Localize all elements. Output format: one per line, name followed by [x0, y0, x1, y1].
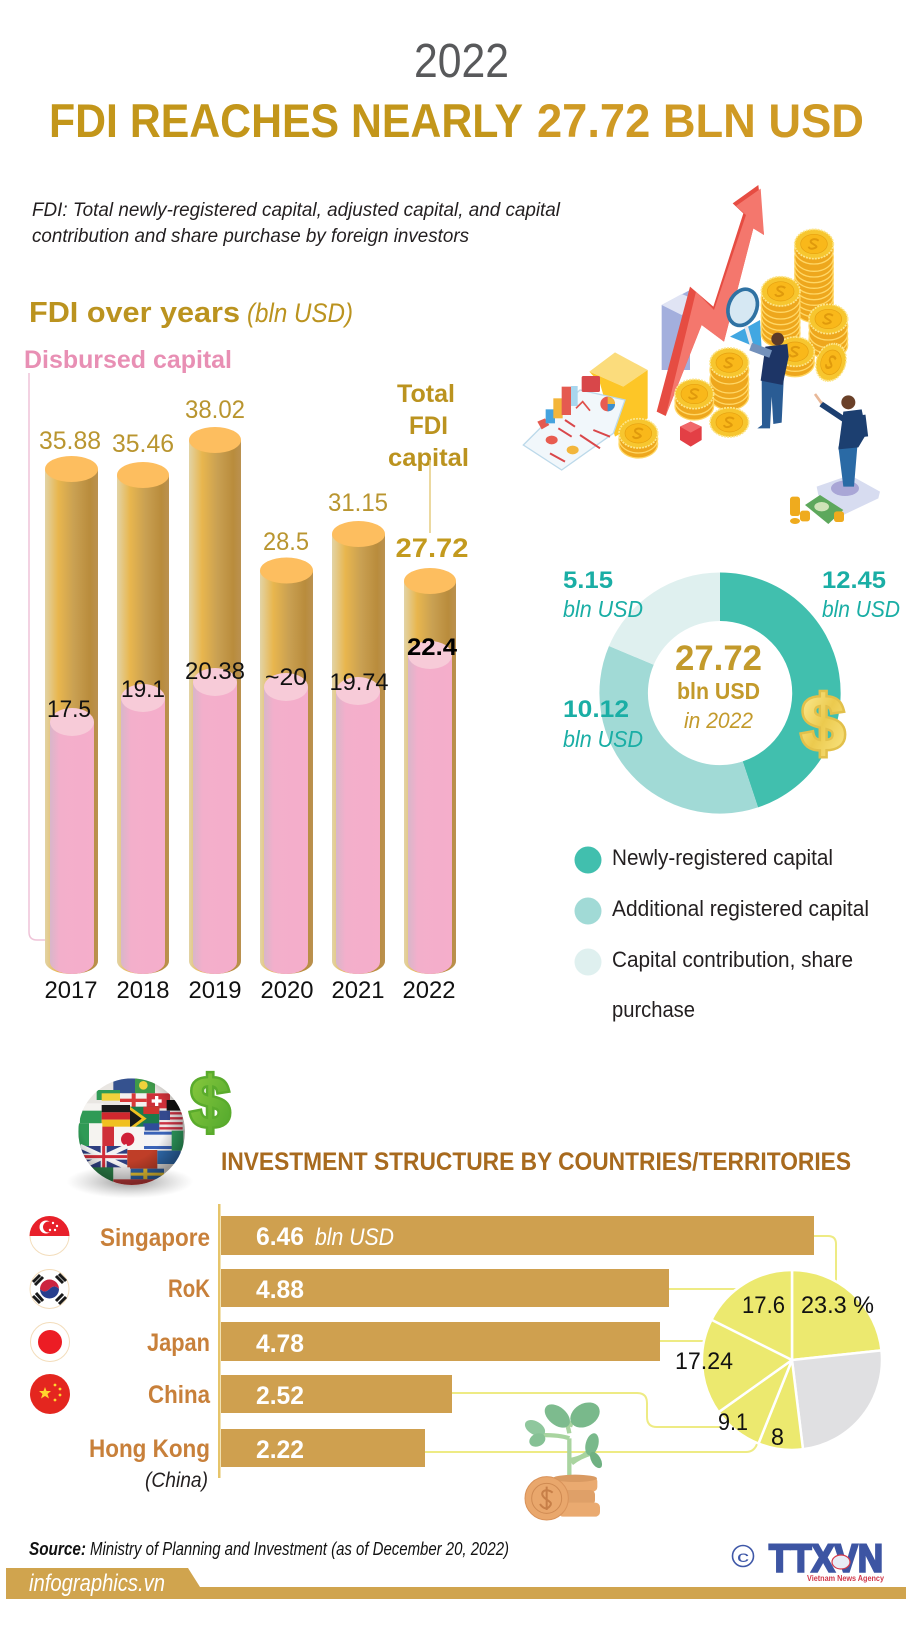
value label: additional registered: 10.12 [563, 696, 629, 723]
Hong Kong row: 2.22 [256, 1436, 304, 1464]
2022 column: 2022 [402, 977, 456, 1004]
FDI over years heading: FDI over years [29, 297, 240, 329]
total FDI capital label and leader: capital [388, 444, 469, 472]
pie chart: investor shares: 9.1 [718, 1409, 748, 1436]
footer banner [6, 1568, 906, 1599]
title [49, 35, 864, 147]
Singapore row: 6.46 [256, 1223, 304, 1251]
Singapore row: bln USD [315, 1224, 394, 1251]
2018 column: 19.1 [121, 676, 165, 703]
FDI definition text: contribution and share purchase by foreign investors [32, 225, 469, 247]
icon: flag globe [74, 1078, 186, 1196]
logo: TTXVN: TTXVN [769, 1538, 883, 1580]
source note: Source: [29, 1538, 86, 1559]
2018 column [112, 430, 174, 1004]
logo: TTXVN: Vietnam News Agency [807, 1574, 884, 1583]
donut legend: Additional registered capital [612, 896, 869, 921]
Singapore row: Singapore [100, 1224, 210, 1252]
title: 27.72 BLN USD [537, 94, 864, 147]
2022 column: 22.4 [407, 634, 458, 661]
China row [30, 1374, 452, 1414]
value label: capital contribution: bln USD [563, 596, 643, 622]
man with magnifier [751, 333, 789, 428]
footer banner: infographics.vn [29, 1570, 165, 1597]
donut centre total: in 2022 [684, 708, 753, 733]
2022 column: 27.72 [396, 533, 468, 563]
pie chart: investor shares: 23.3 % [801, 1292, 874, 1319]
value label: capital contribution: 5.15 [563, 567, 613, 594]
donut legend: Capital contribution, share [612, 947, 853, 972]
connector lines to share pie [425, 1236, 836, 1452]
investment structure heading: INVESTMENT STRUCTURE BY COUNTRIES/TERRITORIES [221, 1148, 851, 1176]
donut centre total [675, 639, 762, 733]
2017 column: 17.5 [47, 696, 91, 723]
value label: additional registered: bln USD [563, 726, 643, 752]
donut legend: Newly-registered capital [612, 845, 833, 870]
Hong Kong row [89, 1429, 425, 1492]
pie chart: investor shares [675, 1270, 882, 1451]
Japan row: Japan [147, 1329, 210, 1357]
2021 column: 2021 [332, 977, 384, 1004]
pie chart: investor shares: 17.6 [742, 1292, 785, 1319]
2017 column: 35.88 [39, 427, 101, 455]
RoK row [30, 1269, 669, 1308]
total FDI capital label and leader: Total [397, 380, 455, 408]
pie chart: investor shares: 17.24 [675, 1348, 733, 1375]
title: FDI REACHES NEARLY [49, 94, 523, 147]
2022 column [396, 533, 468, 1004]
donut segments [599, 572, 841, 814]
Hong Kong row: Hong Kong [89, 1435, 210, 1463]
horizontal bar chart: investors [30, 1204, 814, 1492]
2021 column: 19.74 [330, 669, 388, 696]
total FDI capital label and leader: FDI [409, 412, 448, 440]
total FDI capital label and leader [388, 380, 469, 533]
donut legend: purchase [612, 997, 695, 1022]
China row: China [148, 1381, 211, 1409]
2020 column: ~20 [265, 664, 307, 691]
2019 column: 2019 [188, 977, 242, 1004]
2018 column: 2018 [116, 977, 170, 1004]
Japan row [30, 1322, 660, 1362]
man pointing on platform [790, 394, 880, 524]
FDI over years heading: (bln USD) [247, 298, 353, 328]
2021 column [328, 489, 388, 1004]
2017 column [39, 427, 101, 1004]
Japan row: 4.78 [256, 1330, 304, 1358]
icon: plant on coins [522, 1397, 605, 1520]
disbursed capital label and leader [24, 346, 232, 940]
2019 column: 38.02 [185, 396, 245, 424]
logo: TTXVN: c [737, 1549, 749, 1566]
Singapore row [30, 1216, 814, 1256]
2018 column: 35.46 [112, 430, 174, 458]
RoK row: 4.88 [256, 1276, 304, 1304]
China row: 2.52 [256, 1382, 304, 1410]
donut centre total: bln USD [677, 678, 760, 704]
2020 column: 28.5 [263, 528, 309, 556]
value label: newly registered: bln USD [822, 596, 900, 622]
value label: capital contribution [563, 567, 643, 622]
cylinder bar chart: total FDI and disbursed capital [24, 346, 469, 1004]
pie chart: investor shares: 8 [771, 1424, 784, 1451]
2019 column [185, 396, 245, 1004]
Hong Kong row: (China) [145, 1469, 208, 1492]
donut legend [574, 845, 869, 1022]
coin stacks [619, 229, 851, 458]
2017 column: 2017 [44, 977, 98, 1004]
donut centre total: 27.72 [675, 639, 762, 678]
value label: newly registered [822, 567, 900, 622]
title: 2022 [414, 35, 509, 88]
logo: TTXVN [732, 1538, 884, 1583]
2019 column: 20.38 [185, 658, 245, 685]
source note: Ministry of Planning and Investment (as of December 20, 2022) [90, 1538, 509, 1559]
FDI definition text [32, 199, 561, 247]
FDI definition text: FDI: Total newly-registered capital, adjusted capital, and capital [32, 199, 561, 221]
donut chart: 2022 FDI structure [563, 567, 900, 814]
RoK row: RoK [168, 1275, 210, 1303]
icon: green dollar: $ [190, 1063, 230, 1143]
FDI over years heading [29, 297, 353, 329]
icon: gold dollar: $ [801, 679, 845, 767]
value label: newly registered: 12.45 [822, 567, 886, 594]
illustration: rising arrow, coins and businessmen [523, 185, 880, 524]
2020 column: 2020 [260, 977, 314, 1004]
disbursed capital label and leader: Disbursed capital [24, 346, 232, 374]
value label: additional registered [563, 696, 643, 752]
2021 column: 31.15 [328, 489, 388, 517]
2020 column [260, 528, 314, 1004]
